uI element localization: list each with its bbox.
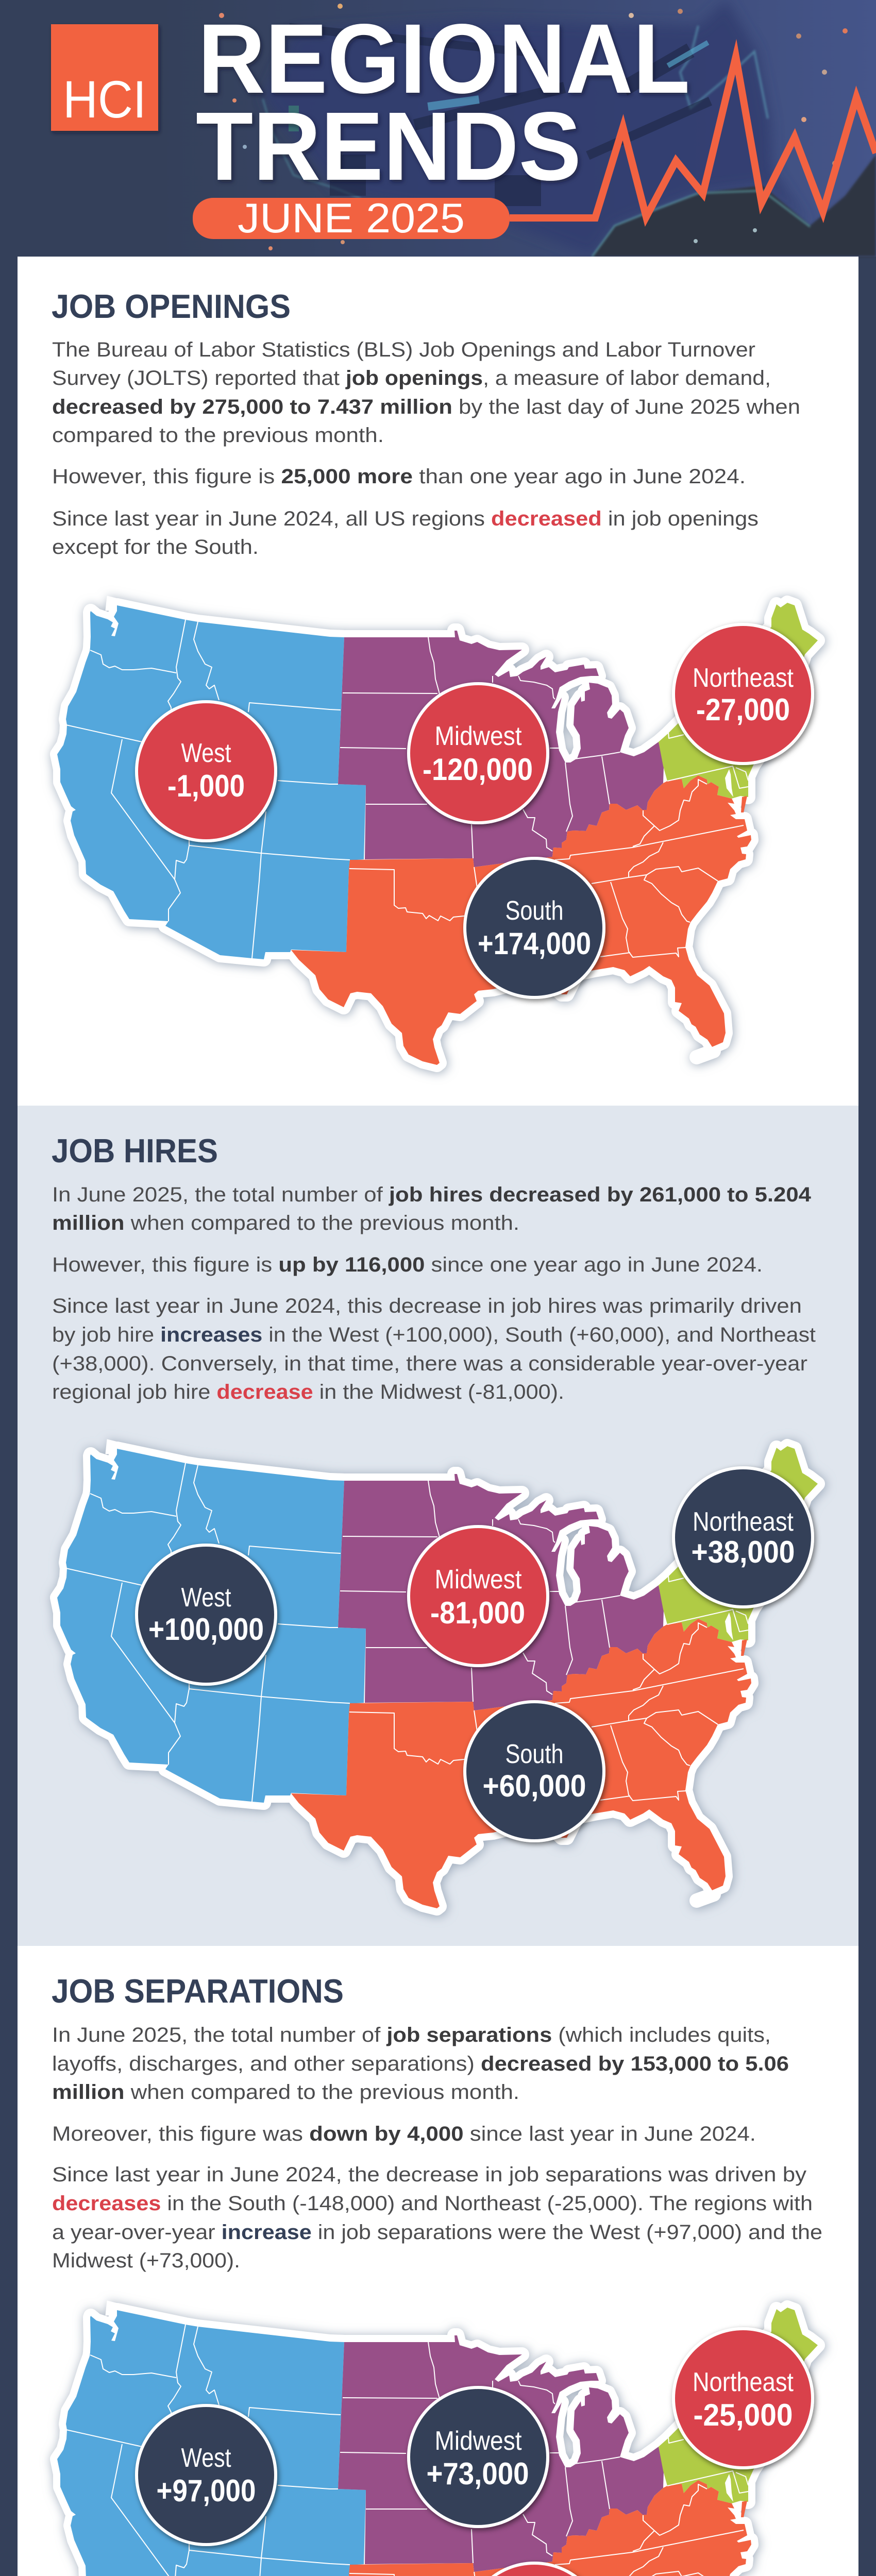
region: northeast [659,603,818,799]
logo: HCI: HCI [63,70,146,129]
text block: job separations summary [52,2024,822,2272]
title: Regional Trends: REGIONAL [198,3,690,114]
callout: South +60,000 [463,1700,605,1842]
text block: job separations summary: Moreover, this figure was down by 4,000 since last year in June 2024. [52,2123,756,2145]
text block: job openings summary: The Bureau of Labor Statistics (BLS) Job Openings and Labor Turnover [52,338,755,361]
callout: West +100,000: West [181,1583,231,1613]
logo: HCI [51,24,158,131]
pulse line [510,57,876,218]
panel: job hires [18,1106,858,1946]
callout: Northeast -25,000 [672,2327,814,2469]
state borders [66,1463,748,1802]
title: Regional Trends: TRENDS [196,92,581,201]
text block: job hires summary: Since last year in June 2024, this decrease in job hires was primarily driven [52,1295,802,1317]
text block: job hires summary [52,1183,816,1403]
text block: job separations summary: Midwest (+73,000). [52,2249,240,2272]
callout: Northeast -25,000: Northeast [693,2367,794,2397]
callout: South +60,000: South [505,1739,564,1769]
text block: job openings summary: Survey (JOLTS) reported that job openings , a measure of labor demand, [52,367,771,389]
callout: Midwest +73,000 [407,2386,549,2528]
callout: Midwest -120,000: -120,000 [423,752,533,787]
map outline [57,1439,818,1908]
callout: South +174,000: South [505,896,564,926]
callout: Northeast -27,000: -27,000 [696,692,790,727]
text block: job openings summary [52,338,800,558]
text block: job separations summary: decreases in the South (-148,000) and Northeast (-25,000). The regions with [52,2192,813,2215]
callout: West +100,000 [135,1544,277,1686]
callout: Midwest -120,000: Midwest [435,721,522,751]
text block: job openings summary: However, this figure is 25,000 more than one year ago in June 2024. [52,465,746,488]
callout: Midwest -81,000 [407,1525,549,1667]
region: south [291,2480,751,2576]
region: west [57,605,366,959]
callout: South -148,000 [463,2562,605,2576]
callout: Midwest -120,000 [407,682,549,824]
map: job hires by region [57,1439,818,1908]
state borders [66,620,748,958]
callout: Midwest +73,000: +73,000 [427,2456,529,2491]
text block: job hires summary: (+38,000). Conversely, in that time, there was a considerable year-over-year [52,1352,807,1375]
region: midwest [338,1474,664,1710]
title: Regional Trends [196,3,690,201]
header background: circuit-board US map [0,0,876,257]
text block: job separations summary: million when compared to the previous month. [52,2081,519,2104]
header banner [0,0,876,257]
region: northeast [659,2308,818,2503]
text block: job openings summary: Since last year in June 2024, all US regions decreased in job openings [52,507,759,530]
text block: job hires summary: However, this figure is up by 116,000 since one year ago in June 2024. [52,1253,763,1276]
callout: Midwest -81,000: Midwest [435,1565,522,1595]
text block: job hires summary: regional job hire decrease in the Midwest (-81,000). [52,1381,564,1403]
region: west [57,2310,366,2576]
region: west [57,1449,366,1803]
map: job separations by region [57,2301,818,2576]
callout: Northeast +38,000: Northeast [693,1507,794,1537]
callout: Northeast -27,000: Northeast [693,663,794,693]
date pill: June 2025 [193,195,510,242]
callout: West +97,000: +97,000 [157,2473,256,2508]
heading: job hires: JOB HIRES [52,1132,218,1170]
callout: Northeast +38,000 [672,1466,814,1608]
text block: job separations summary: layoffs, discharges, and other separations) decreased by 153,000 to 5.06 [52,2053,789,2075]
panel: job openings [18,257,858,1106]
text block: job separations summary: In June 2025, the total number of job separations (which includes quits, [52,2024,771,2046]
callout: Midwest +73,000: Midwest [435,2426,522,2456]
state borders [66,2325,748,2576]
callout: West -1,000: -1,000 [167,769,245,803]
callout: South +174,000: +174,000 [478,926,591,961]
map outline [57,596,818,1065]
text block: job separations summary: Since last year in June 2024, the decrease in job separations was driven by [52,2163,806,2186]
region: midwest [338,2335,664,2572]
panel: job separations [18,1946,858,2576]
callout: West +97,000 [135,2404,277,2546]
callout: West -1,000 [135,700,277,842]
region: northeast [659,1446,818,1642]
region: midwest [338,631,664,867]
callout: Northeast -27,000 [672,623,814,765]
text block: job hires summary: by job hire increases in the West (+100,000), South (+60,000), and Northeast [52,1324,816,1346]
callout: Northeast +38,000: +38,000 [692,1535,795,1569]
callout: West +97,000: West [181,2443,231,2473]
text block: job openings summary: decreased by 275,000 to 7.437 million by the last day of June 2025 when [52,396,800,418]
text block: job openings summary: compared to the previous month. [52,424,384,447]
callout: South +60,000: +60,000 [482,1769,586,1803]
region: south [291,775,751,1065]
map: job openings by region [57,596,818,1065]
date pill: June 2025: JUNE 2025 [238,195,465,242]
callout: West +100,000: +100,000 [148,1612,264,1647]
callout: Northeast -25,000: -25,000 [694,2398,793,2432]
region: south [291,1619,751,1908]
text block: job openings summary: except for the South. [52,536,259,558]
callout: Midwest -81,000: -81,000 [430,1596,525,1630]
text block: job hires summary: million when compared to the previous month. [52,1212,519,1234]
text block: job hires summary: In June 2025, the total number of job hires decreased by 261,000 to 5.204 [52,1183,812,1206]
heading: job separations: JOB SEPARATIONS [52,1972,344,2010]
text block: job separations summary: a year-over-year increase in job separations were the West (+97,000) and the [52,2221,822,2244]
map outline [57,2301,818,2576]
callout: South +174,000 [463,857,605,999]
heading: job openings: JOB OPENINGS [52,287,291,325]
callout: West -1,000: West [181,738,231,768]
